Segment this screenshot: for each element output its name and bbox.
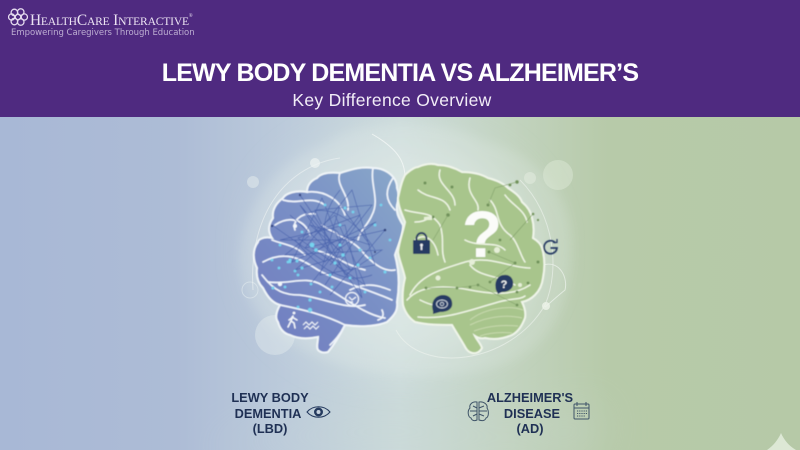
icon: large question mark: ? bbox=[462, 197, 502, 271]
title: LEWY BODY DEMENTIA VS ALZHEIMER’S bbox=[162, 59, 638, 87]
brain folds bbox=[405, 170, 530, 318]
network dots bbox=[424, 180, 540, 306]
icon: memory dial bbox=[346, 292, 358, 306]
icon: padlock bbox=[413, 233, 430, 254]
brain folds bbox=[262, 168, 395, 345]
brain outline icon bbox=[468, 402, 488, 421]
icon: walking figure bbox=[288, 312, 297, 328]
cerebellum bbox=[470, 308, 523, 336]
icon: tremor waves bbox=[303, 322, 319, 329]
label: Alzheimer's disease bbox=[487, 390, 573, 436]
calendar icon bbox=[574, 402, 589, 419]
icon: speech bubble with question mark: ? bbox=[501, 279, 508, 291]
subtitle: Key Difference Overview bbox=[292, 90, 492, 110]
icon: refresh G bbox=[544, 239, 557, 254]
label: Lewy body dementia: DEMENTIA bbox=[235, 406, 301, 420]
icon: speech bubble with swirl bbox=[432, 295, 452, 314]
label: Lewy body dementia: (LBD) bbox=[253, 421, 287, 436]
label: Alzheimer's disease: ALZHEIMER'S bbox=[487, 390, 573, 405]
left brain: Lewy body dementia bbox=[254, 167, 403, 353]
icon: speech bubble with question mark bbox=[495, 275, 513, 294]
label: Alzheimer's disease: (AD) bbox=[516, 421, 544, 436]
neural network bbox=[272, 190, 385, 298]
right brain: Alzheimer's disease bbox=[398, 164, 557, 353]
neuron dots bbox=[271, 204, 391, 312]
logo icon bbox=[8, 8, 28, 26]
logo wordmark: HEALTHCARE INTERACTIVE® bbox=[30, 12, 192, 29]
label: Lewy body dementia: LEWY BODY bbox=[231, 390, 309, 405]
eye icon bbox=[307, 407, 330, 417]
header band bbox=[0, 0, 800, 117]
label: Lewy body dementia bbox=[231, 390, 309, 436]
label: Alzheimer's disease: DISEASE bbox=[504, 406, 560, 420]
logo tagline: Empowering Caregivers Through Education bbox=[11, 28, 195, 38]
